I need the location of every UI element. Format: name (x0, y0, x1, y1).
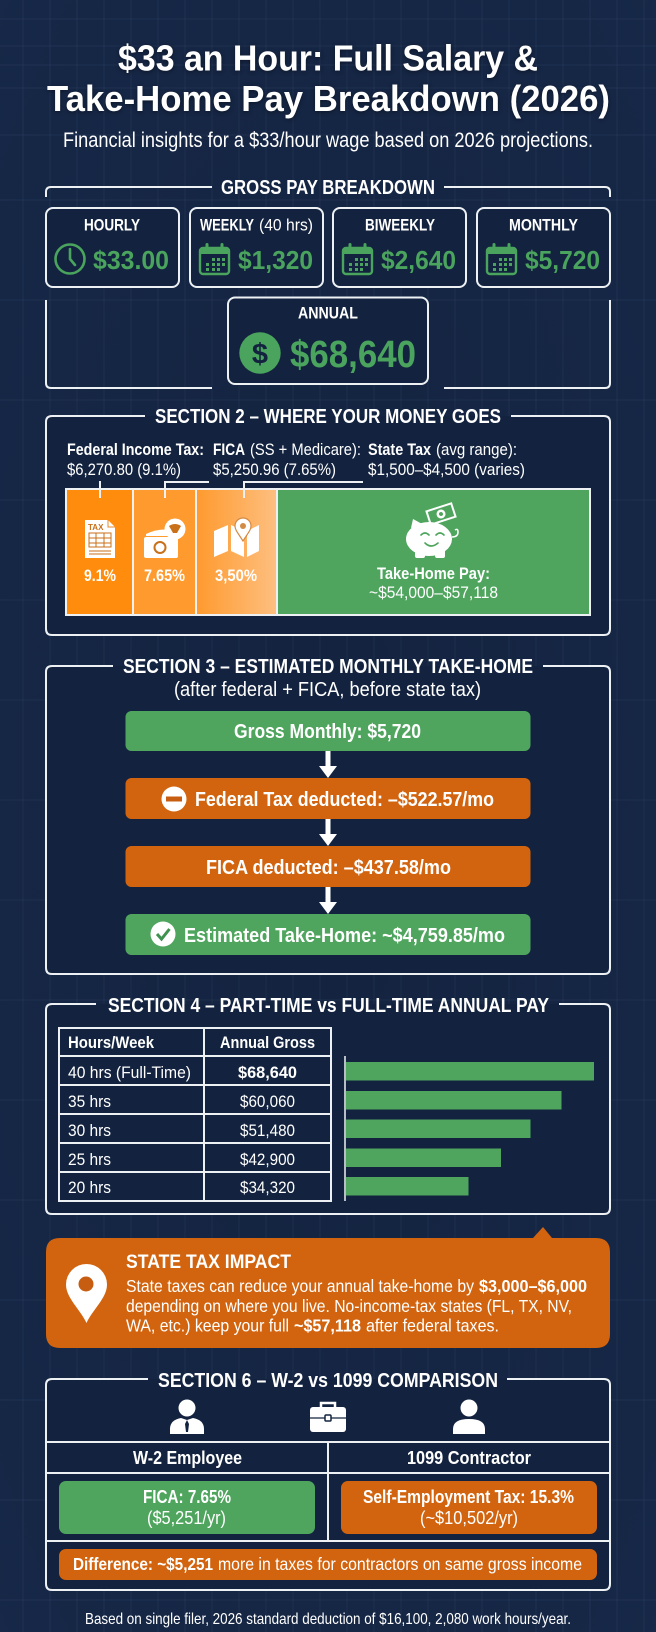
heading: gross pay breakdown: GROSS PAY BREAKDOWN (221, 177, 435, 199)
label: take-home pay (369, 564, 498, 602)
icon: check (150, 922, 176, 946)
card: hourly: HOURLY (84, 216, 141, 234)
icon: tax form (85, 520, 115, 558)
body text (126, 1276, 587, 1336)
step: gross monthly: Gross Monthly: $5,720 (234, 721, 421, 743)
box: difference: more in taxes for contractors on same gross income (218, 1554, 582, 1574)
title (47, 38, 610, 119)
icon: employee (170, 1400, 204, 1434)
title: $33 an Hour: Full Salary & (118, 38, 538, 78)
card: monthly: $5,720 (525, 245, 600, 275)
box: 1099 self-employment tax (341, 1481, 597, 1534)
body text: after federal taxes. (366, 1316, 499, 1336)
stacked bar (66, 481, 590, 615)
arrow (319, 887, 337, 914)
card: biweekly: BIWEEKLY (365, 216, 436, 234)
panel: where your money goes (46, 406, 610, 635)
table: 40 hrs (Full-Time) (68, 1063, 191, 1082)
step: fica (126, 846, 530, 887)
icon: contractor (453, 1400, 485, 1434)
label: federal income tax: $6,270.80 (9.1%) (67, 461, 181, 479)
icon: minus (162, 786, 186, 812)
callout: state tax impact: STATE TAX IMPACT (126, 1252, 291, 1273)
box: w-2 fica: FICA: 7.65% (143, 1487, 231, 1507)
card: weekly: WEEKLY (200, 216, 254, 234)
table: $34,320 (240, 1178, 295, 1197)
label: fica (213, 441, 361, 479)
stacked bar: 3,50% (215, 567, 257, 585)
bar chart (345, 1056, 594, 1201)
label: take-home pay: ~$54,000–$57,118 (369, 584, 498, 602)
label: state tax (368, 441, 525, 479)
label: federal income tax (67, 441, 204, 479)
table: 25 hrs (68, 1150, 111, 1169)
icon: clock (56, 244, 84, 274)
card: hourly: $33.00 (93, 245, 169, 275)
card: biweekly (333, 208, 466, 287)
stacked bar: 7.65% (144, 567, 185, 585)
icon: calendar (343, 243, 372, 274)
label: take-home pay: Take-Home Pay: (377, 564, 490, 583)
card: annual: $68,640 (290, 334, 416, 376)
label: fica: FICA (213, 441, 245, 459)
heading: section 3: SECTION 3 – ESTIMATED MONTHLY TAKE-HOME (123, 656, 533, 678)
step: federal tax: Federal Tax deducted: –$522.57/mo (195, 789, 494, 811)
table: Annual Gross (220, 1034, 315, 1052)
label: fica: $5,250.96 (7.65%) (213, 461, 336, 479)
box: w-2 fica: ($5,251/yr) (147, 1508, 226, 1528)
panel: w-2 vs 1099 comparison: 1099 Contractor (407, 1447, 531, 1468)
heading: section 2: SECTION 2 – WHERE YOUR MONEY GOES (155, 406, 501, 428)
table: Hours/Week (68, 1034, 155, 1052)
card: annual (228, 298, 428, 384)
panel: gross pay breakdown (46, 177, 610, 388)
stacked bar: 9.1% (84, 567, 116, 585)
body text: WA, etc.) keep your full (126, 1316, 289, 1336)
icon: map with pin (214, 518, 259, 557)
card: monthly: MONTHLY (509, 216, 579, 234)
panel: estimated monthly take-home (46, 656, 610, 974)
icon: briefcase (310, 1403, 346, 1432)
icon: calendar (487, 243, 516, 274)
step: fica: FICA deducted: –$437.58/mo (206, 857, 451, 879)
body text: $3,000–$6,000 (479, 1276, 587, 1296)
box: 1099 self-employment tax: Self-Employment Tax: 15.3% (363, 1487, 574, 1507)
card: weekly: (40 hrs) (259, 216, 313, 234)
card: weekly: $1,320 (238, 245, 313, 275)
body text: State taxes can reduce your annual take-home by (126, 1276, 474, 1296)
icon: tax form: TAX (88, 523, 104, 532)
table: $51,480 (240, 1121, 295, 1140)
body text: depending on where you live. No-income-tax states (FL, TX, NV, (126, 1296, 572, 1316)
body text: ~$57,118 (294, 1316, 361, 1336)
card: weekly (190, 208, 323, 287)
icon: location pin (66, 1264, 107, 1323)
table: 20 hrs (68, 1178, 111, 1197)
arrow (319, 819, 337, 846)
table: $42,900 (240, 1150, 295, 1169)
card: monthly (477, 208, 610, 287)
box: difference (59, 1549, 597, 1580)
table: $60,060 (240, 1092, 295, 1111)
step: gross monthly (126, 711, 530, 751)
label: state tax: $1,500–$4,500 (varies) (368, 461, 525, 479)
panel: part-time vs full-time (46, 995, 610, 1214)
card: annual: ANNUAL (298, 304, 358, 322)
subheading: (after federal + FICA, before state tax) (174, 679, 481, 701)
footer note: Based on single filer, 2026 standard deduction of $16,100, 2,080 work hours/year. (85, 1611, 571, 1628)
table: 35 hrs (68, 1092, 111, 1111)
label: state tax: State Tax (368, 441, 432, 459)
heading: section 6: SECTION 6 – W-2 vs 1099 COMPARISON (158, 1370, 498, 1392)
label: federal income tax: Federal Income Tax: (67, 441, 204, 459)
step: estimated take-home: Estimated Take-Home: ~$4,759.85/mo (184, 925, 505, 947)
step: estimated take-home (126, 914, 530, 955)
card: hourly (46, 208, 179, 287)
title: Take-Home Pay Breakdown (2026) (47, 78, 610, 119)
box: w-2 fica (59, 1481, 315, 1534)
panel: w-2 vs 1099 comparison: W-2 Employee (133, 1447, 242, 1468)
card: biweekly: $2,640 (381, 245, 456, 275)
step: federal tax (126, 778, 530, 819)
box: difference: Difference: ~$5,251 (73, 1554, 213, 1574)
arrow (319, 751, 337, 778)
callout: state tax impact (46, 1227, 610, 1348)
box: 1099 self-employment tax: (~$10,502/yr) (420, 1508, 518, 1528)
table: 30 hrs (68, 1121, 111, 1140)
table (59, 1028, 331, 1201)
icon: piggy bank (406, 502, 458, 558)
table: $68,640 (238, 1063, 297, 1082)
label: fica: (SS + Medicare): (250, 441, 361, 459)
panel: w-2 vs 1099 comparison (46, 1370, 610, 1590)
icon: dollar circle: $ (252, 338, 268, 370)
connectors (100, 481, 363, 498)
heading: section 4: SECTION 4 – PART-TIME vs FULL-TIME ANNUAL PAY (108, 995, 550, 1017)
icon: dollar circle (239, 332, 281, 374)
label: state tax: (avg range): (436, 441, 517, 459)
icon: money (144, 518, 186, 558)
icon: calendar (200, 243, 229, 274)
